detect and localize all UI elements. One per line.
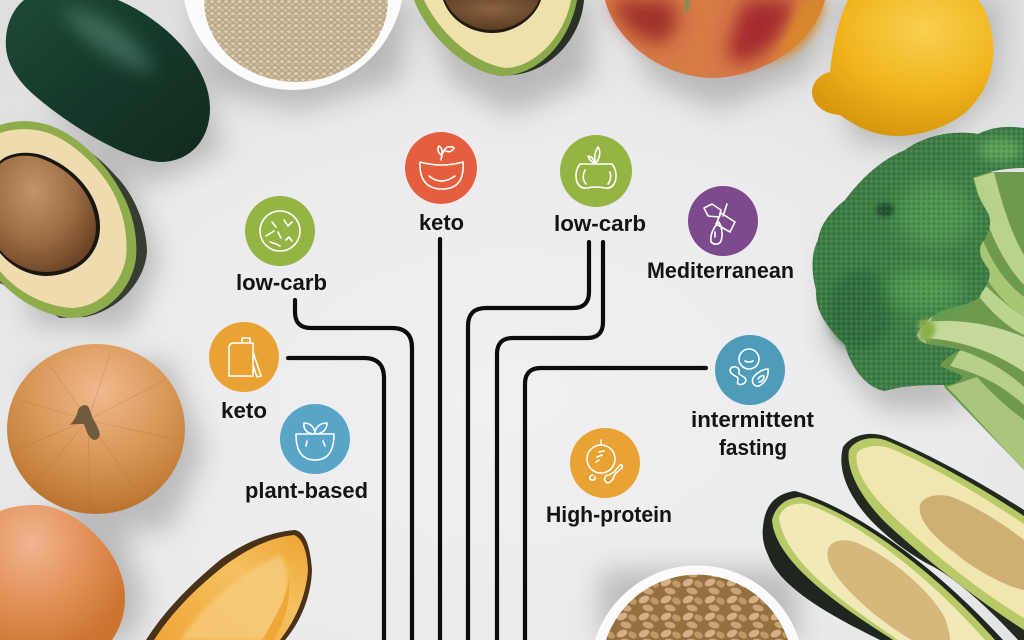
icon: round food and spoon bbox=[587, 440, 622, 483]
line: intermittent fasting bbox=[525, 368, 706, 640]
food: avocado slice front bbox=[763, 491, 1003, 640]
food: mango top bbox=[605, 0, 825, 78]
label: plant-based bbox=[245, 478, 368, 503]
label line 2: fasting bbox=[719, 435, 787, 460]
food: avocado half left bbox=[0, 121, 147, 318]
food: lemon bbox=[812, 0, 993, 136]
line: keto left bbox=[288, 358, 384, 640]
label: keto bbox=[221, 398, 267, 423]
icon: bowl with leaf bbox=[420, 146, 463, 189]
icon: olive oil and tin bbox=[704, 204, 735, 244]
label: Mediterranean bbox=[647, 258, 794, 283]
icon: bottle bbox=[229, 338, 261, 377]
food: orange bottom left bbox=[0, 505, 125, 640]
label: keto bbox=[419, 210, 464, 235]
food: avocado slice back bbox=[841, 434, 1024, 640]
food: avocado half top bbox=[414, 0, 584, 76]
food: dark avocado top left bbox=[6, 0, 210, 162]
line: low-carb right inner bbox=[468, 242, 589, 640]
icon: apple bowl bbox=[576, 147, 616, 188]
label: low-carb bbox=[236, 270, 327, 295]
line: low-carb left bbox=[295, 300, 412, 640]
icon: fasting symbols bbox=[730, 349, 768, 386]
label: intermittent bbox=[691, 407, 815, 432]
connector lines bbox=[288, 239, 706, 640]
node: intermittent fasting bbox=[691, 335, 815, 460]
node: Mediterranean bbox=[647, 186, 794, 283]
food: orange melon bbox=[7, 344, 185, 514]
food: bowl of nuts bbox=[595, 565, 799, 640]
food: bowl of quinoa bbox=[184, 0, 402, 90]
food: mango slice bbox=[146, 530, 312, 640]
food: broccoli bbox=[812, 127, 1024, 470]
node: plant-based bbox=[245, 404, 368, 503]
melon ribs bbox=[16, 355, 178, 510]
line: keto top bbox=[438, 239, 442, 640]
node: low-carb right bbox=[554, 135, 646, 236]
node: low-carb left bbox=[236, 196, 327, 295]
broccoli stems bbox=[925, 172, 1024, 470]
node: keto left bbox=[209, 322, 279, 423]
label: High-protein bbox=[546, 502, 672, 527]
broccoli crown bbox=[812, 127, 1024, 391]
label: low-carb bbox=[554, 211, 646, 236]
icon: sprout bowl bbox=[296, 423, 334, 460]
node: High-protein bbox=[546, 428, 672, 527]
line: low-carb right outer bbox=[497, 242, 603, 640]
icon: plate of herbs bbox=[260, 211, 300, 251]
node: keto top bbox=[405, 132, 477, 235]
